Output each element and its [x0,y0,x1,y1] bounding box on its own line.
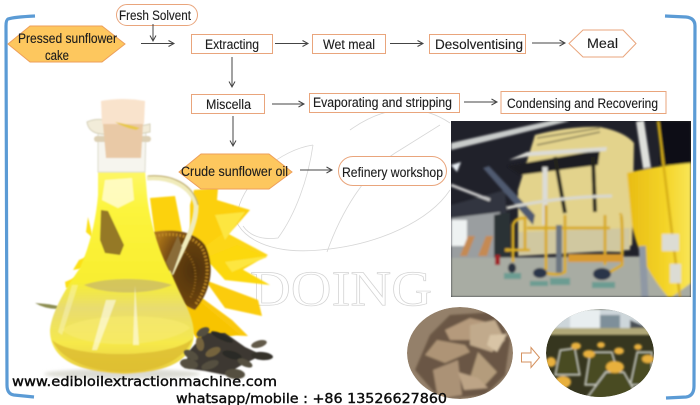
box: Wet meal [312,34,386,54]
left bracket [6,16,35,397]
pill: Refinery workshop [338,156,446,186]
box: Wet meal: Wet meal [323,37,375,52]
sunflower seen through glass [100,210,124,255]
bottle handle [147,178,196,274]
pill: Refinery workshop: Refinery workshop [342,165,443,180]
hexagon: Meal [569,30,636,57]
illustration: oil bottle [44,99,200,379]
watermark: DOING logo [233,109,450,316]
hexagon: Pressed sunflower cake: cake [45,48,69,63]
box: Desolventising: Desolventising [435,37,523,52]
website text: www.edibloilextractionmachine.com [12,374,277,390]
hexagon: Pressed sunflower cake [8,26,125,63]
hexagon: Pressed sunflower cake: Pressed sunflower [18,31,117,46]
box: Extracting [192,34,272,54]
pill: Fresh Solvent [116,4,198,26]
illustration: sunflower seeds [179,325,273,380]
box: Evaporating and stripping: Evaporating and stripping [313,95,452,110]
sunflower center [153,231,211,310]
box: Miscella: Miscella [206,97,251,112]
watermark: DOING logo: DOING [250,260,432,316]
photo: oil bottles circle [546,309,654,400]
box: Extracting: Extracting [205,37,259,52]
bottle body [50,168,194,374]
hexagon: Crude sunflower oil [179,154,292,189]
photo: extraction workshop [451,120,691,297]
pill: Fresh Solvent: Fresh Solvent [119,8,191,23]
flow arrows [141,24,565,170]
box: Condensing and Recovering [501,92,666,114]
box: Condensing and Recovering: Condensing and Recovering [507,96,658,111]
hexagon: Crude sunflower oil: Crude sunflower oil [181,164,288,179]
bottle neck [98,130,146,172]
box: Miscella [192,94,264,114]
illustration: sunflower behind bottle [35,188,270,340]
icon: hollow arrow [522,348,540,368]
bottle cork [101,99,145,126]
photo: sunflower cake circle [407,307,513,399]
hexagon: Meal: Meal [587,36,618,51]
right bracket [665,16,695,398]
